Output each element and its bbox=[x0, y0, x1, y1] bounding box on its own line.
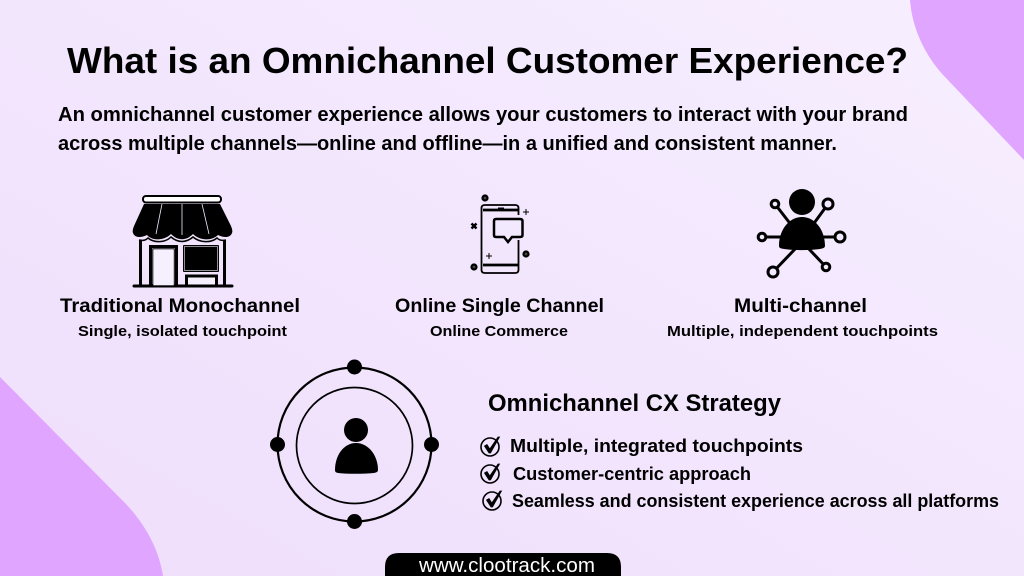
heading: Multi-channel bbox=[734, 296, 867, 317]
list item 3: Seamless and consistent experience across all platforms bbox=[512, 491, 999, 511]
icon: person with connected nodes bbox=[758, 189, 845, 277]
corner shape: top right bbox=[910, 0, 1024, 160]
intro paragraph: An omnichannel customer experience allows your customers to interact with your brand bbox=[58, 104, 908, 126]
panel: omnichannel CX strategy bbox=[481, 390, 999, 511]
caption: Online Commerce bbox=[430, 323, 568, 340]
panel: multi-channel bbox=[667, 189, 938, 340]
heading: Omnichannel CX Strategy bbox=[488, 390, 782, 417]
corner shape: bottom left bbox=[0, 377, 163, 576]
icon: smartphone with chat bubble bbox=[472, 196, 529, 273]
panel: traditional monochannel bbox=[60, 196, 300, 340]
heading: Traditional Monochannel bbox=[60, 296, 300, 317]
icon: storefront bbox=[133, 196, 232, 286]
caption: Single, isolated touchpoint bbox=[78, 323, 287, 340]
icon: customer orbit diagram bbox=[270, 360, 439, 529]
caption: Multiple, independent touchpoints bbox=[667, 323, 938, 340]
intro paragraph bbox=[58, 104, 908, 155]
list item 2: Customer-centric approach bbox=[513, 464, 751, 484]
website badge bbox=[385, 553, 621, 576]
panel: online single channel bbox=[395, 196, 604, 340]
list item 1: Multiple, integrated touchpoints bbox=[510, 436, 803, 456]
heading: Online Single Channel bbox=[395, 296, 604, 317]
intro paragraph: across multiple channels—online and offline—in a unified and consistent manner. bbox=[58, 133, 837, 155]
title: What is an Omnichannel Customer Experience? bbox=[67, 40, 908, 81]
